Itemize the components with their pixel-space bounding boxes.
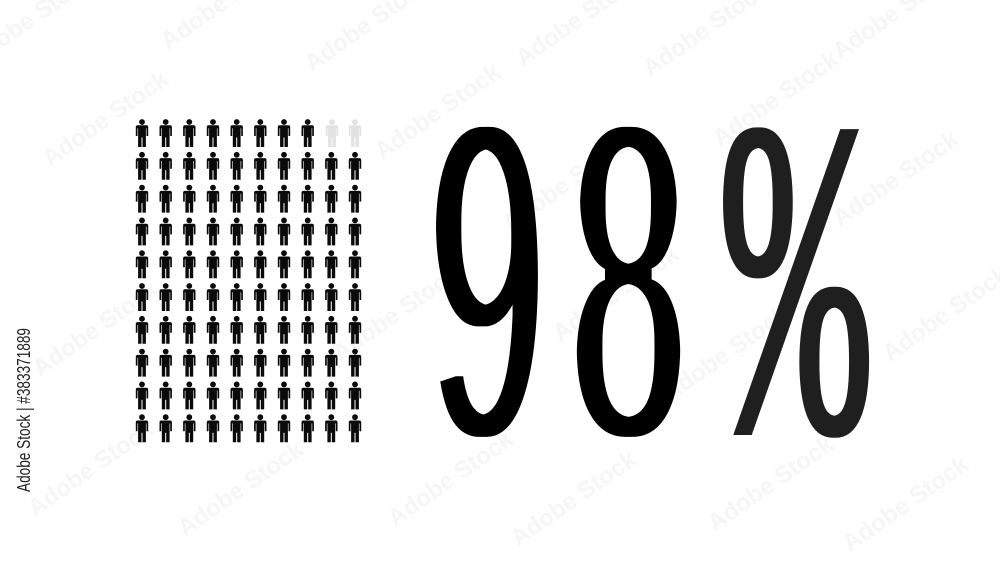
watermark pattern: Adobe Stock xyxy=(28,275,164,382)
watermark pattern: Adobe Stock xyxy=(173,435,309,542)
digit 9: 9 xyxy=(430,29,544,534)
watermark pattern: Adobe Stock xyxy=(828,125,964,232)
watermark pattern: Adobe Stock xyxy=(38,65,174,172)
watermark pattern: Adobe Stock xyxy=(23,415,159,522)
watermark pattern: Adobe Stock xyxy=(838,450,974,557)
black people: 98 filled xyxy=(136,119,361,442)
digit 8: 8 xyxy=(571,29,686,534)
watermark pattern: Adobe Stock xyxy=(506,445,642,552)
percent sign: % xyxy=(725,46,870,563)
watermark pattern: Adobe Stock xyxy=(658,300,794,407)
watermark pattern: Adobe Stock xyxy=(703,430,839,537)
watermark pattern: Adobe Stock xyxy=(498,130,634,237)
grey people: 2 not filled xyxy=(326,119,361,147)
big percentage figure: 98% xyxy=(430,29,870,563)
watermark pattern: Adobe Stock xyxy=(328,260,464,367)
watermark pattern: Adobe Stock xyxy=(708,45,844,152)
watermark pattern: Adobe Stock xyxy=(383,425,519,532)
watermark pattern: Adobe Stock xyxy=(370,58,506,165)
stock id caption: Adobe Stock | #383371889 xyxy=(14,328,34,492)
watermark pattern: Adobe Stock xyxy=(548,240,684,347)
pictogram grid: 100 people xyxy=(136,119,361,442)
